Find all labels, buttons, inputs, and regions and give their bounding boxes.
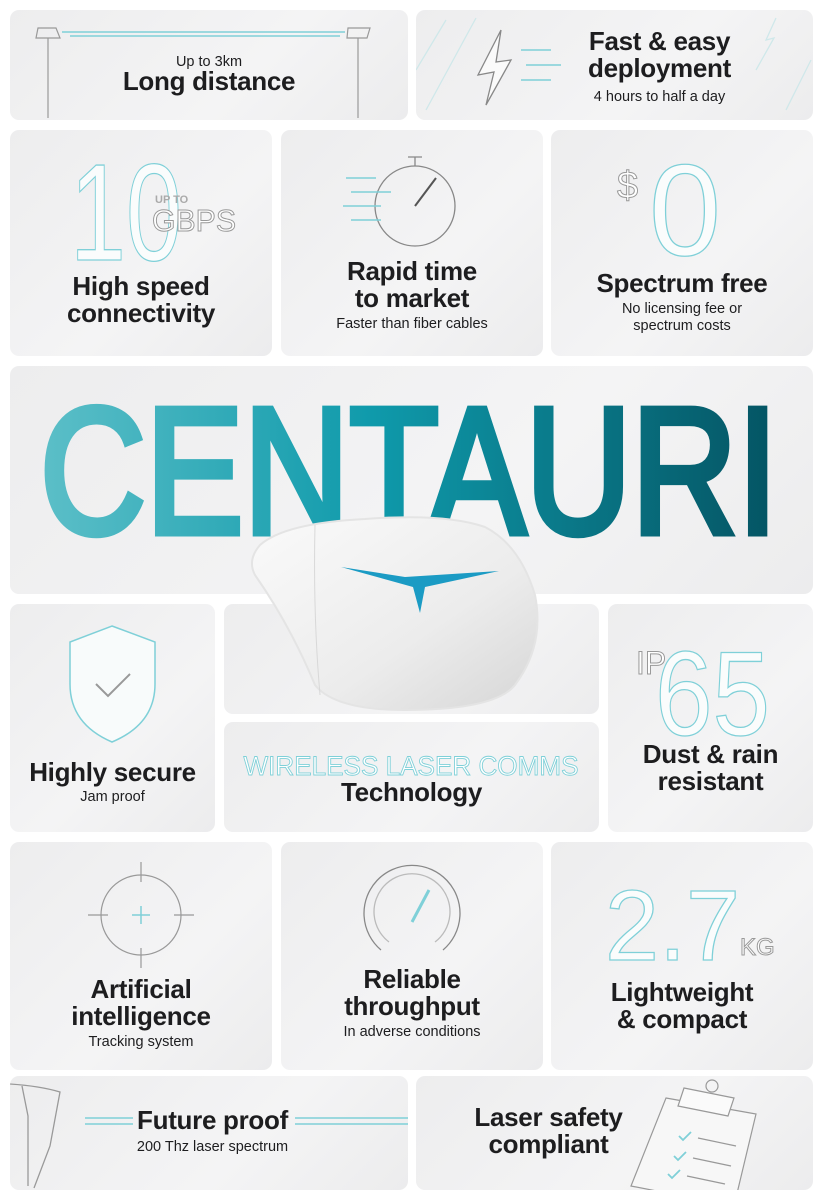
panel: rapid time [281,130,543,356]
device image [251,516,538,711]
subtext [622,301,742,334]
panel: high speed [10,130,272,356]
heading: compliant [488,1129,609,1159]
panel: lightweight [551,842,813,1070]
subtext: Jam proof [80,789,145,805]
panel: laser safety [416,1076,813,1190]
subtext: 4 hours to half a day [594,89,725,105]
subtext: No licensing fee or [622,301,742,317]
icon: $0: 0 [649,137,721,283]
icon: $0: $ [617,165,638,207]
heading: Artificial [90,974,192,1004]
panel: IP65 [608,604,813,832]
panel: fast deployment [416,10,813,120]
panel: reliable throughput [281,842,543,1070]
subtext: spectrum costs [633,318,731,334]
icon: gauge [363,864,461,950]
icon: shield [69,625,156,743]
heading [643,739,778,796]
subtext: 200 Thz laser spectrum [137,1139,288,1155]
heading: Fast & easy [589,26,730,56]
heading: intelligence [71,1001,211,1031]
heading: Future proof [137,1105,288,1135]
icon: 2.7kg: KG [740,934,775,961]
heading: to market [355,283,469,313]
heading [71,974,211,1031]
icon: crosshair [88,862,194,968]
heading: Lightweight [611,977,753,1007]
panel: centauri logo [10,366,813,594]
icon: clipboard [630,1079,757,1190]
heading: High speed [72,271,210,301]
icon: device outline [10,1083,408,1188]
icon: lightning [416,18,812,110]
heading: deployment [588,53,731,83]
heading: Highly secure [29,757,196,787]
icon: IP65: 65 [655,627,770,761]
panel: future proof [10,1076,408,1190]
panel: device backdrop [224,604,599,714]
heading: throughput [344,991,480,1021]
heading: & compact [617,1004,747,1034]
icon: 2.7kg: 2.7 [605,870,740,982]
panel: long distance [10,10,408,120]
text: wireless laser comms: WIRELESS LASER COMMS [244,751,578,781]
heading: Laser safety [474,1102,623,1132]
heading: Technology [341,777,482,807]
heading [474,1102,623,1159]
subtext: Tracking system [88,1034,194,1050]
heading: connectivity [67,298,215,328]
icon: laser link towers [35,27,371,118]
heading: Dust & rain [643,739,778,769]
heading [347,256,477,313]
heading: Spectrum free [597,268,767,298]
subtext: Faster than fiber cables [336,316,488,332]
heading [588,26,731,83]
icon: IP65: IP [636,645,666,681]
subtext: In adverse conditions [343,1024,481,1040]
panel: wireless laser comms [224,722,599,832]
heading [611,977,754,1034]
text: up to 3km: Up to 3km [176,54,242,70]
icon: stopwatch [343,156,456,247]
heading: Reliable [363,964,461,994]
icon: $0 [616,137,721,283]
icon: 10 gbps: UP TO [155,194,189,206]
heading [344,964,480,1021]
heading: resistant [658,766,763,796]
icon: 10 gbps: GBPS [152,203,236,238]
panel: highly secure [10,604,215,832]
panel: spectrum free [551,130,813,356]
icon: 10 gbps: 10 [70,136,182,290]
heading [67,271,216,328]
heading: Rapid time [347,256,477,286]
panel: artificial intelligence [10,842,272,1070]
heading: long distance: Long distance [123,66,295,96]
